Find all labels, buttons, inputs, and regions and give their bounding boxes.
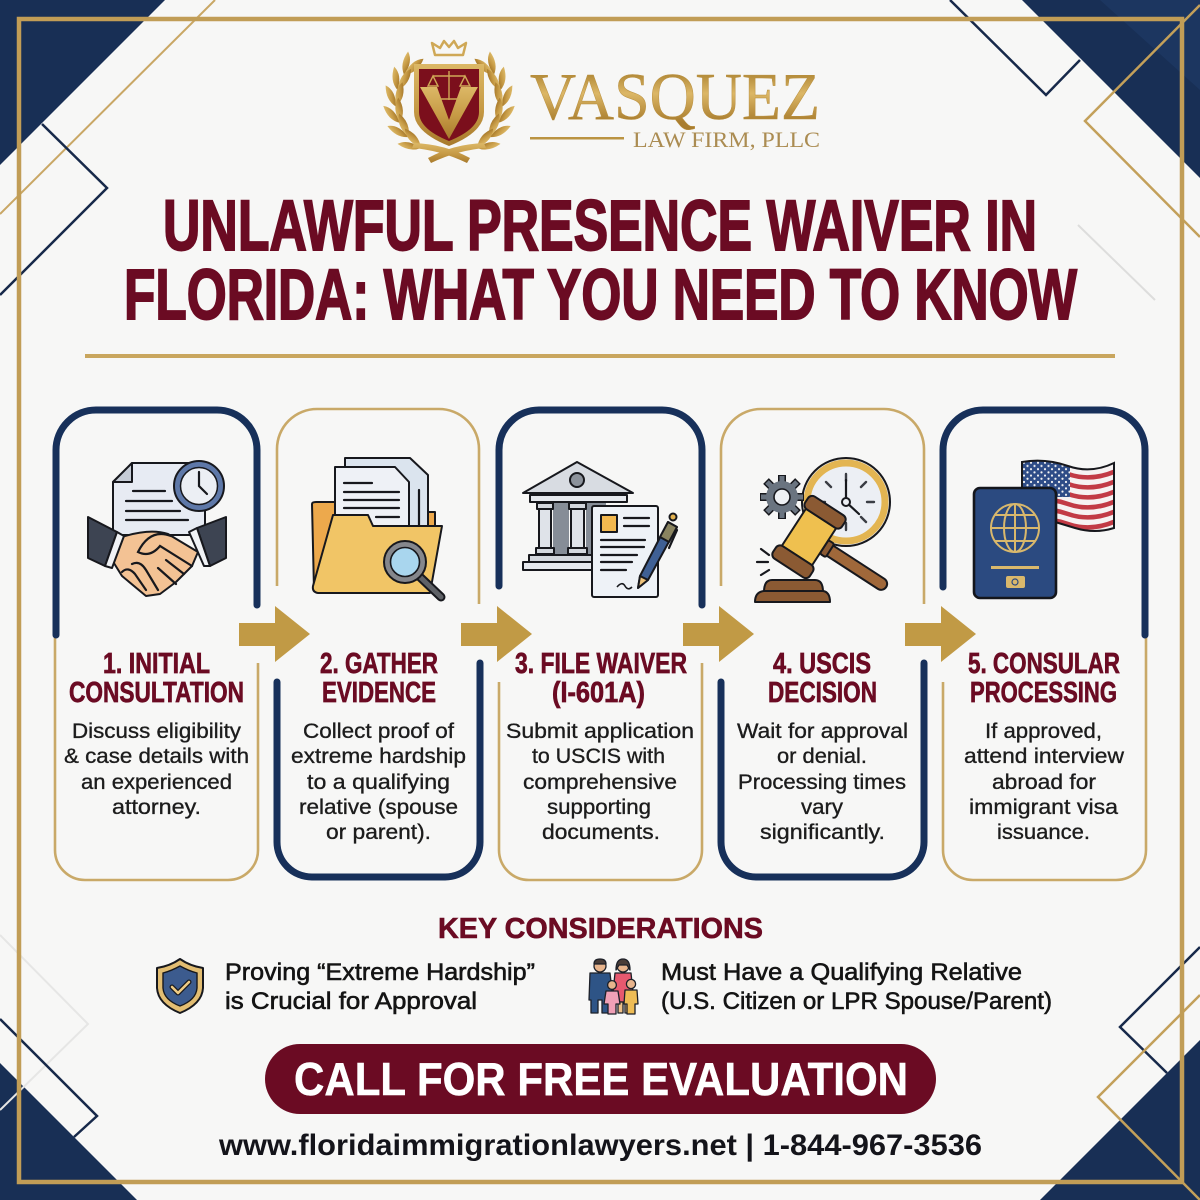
step 4 text <box>737 719 908 844</box>
step 2 text <box>291 719 466 844</box>
icon: family <box>589 959 638 1014</box>
text: extreme hardship <box>225 959 535 1015</box>
step 1 text: an experienced <box>81 770 232 794</box>
consideration: extreme hardship <box>157 959 535 1015</box>
arrow: step 2 to 3 <box>461 606 532 662</box>
text: extreme hardship: Proving “Extreme Hardship” <box>225 959 535 986</box>
step 1 heading: 1. INITIAL <box>103 648 210 680</box>
wordmark: Vasquez: VASQUEZ <box>530 60 820 134</box>
divider line <box>530 137 624 140</box>
title <box>124 187 1077 335</box>
step 4 text: significantly. <box>760 820 885 844</box>
text: qualifying relative: Must Have a Qualifying Relative <box>661 959 1022 986</box>
panel: step 2 <box>277 409 480 877</box>
step 2 text: extreme hardship <box>291 744 466 768</box>
step 5 text: immigrant visa <box>969 795 1118 819</box>
icon: shield with check <box>157 959 203 1013</box>
step 3 heading: 3. FILE WAIVER <box>515 648 687 680</box>
step 5 text <box>964 719 1124 844</box>
consideration: qualifying relative <box>589 959 1052 1015</box>
step 4 heading: 4. USCIS <box>773 648 871 680</box>
panel: step 4 <box>721 409 924 877</box>
icon: handshake and document <box>88 461 226 596</box>
step 5 text: attend interview <box>964 744 1124 768</box>
arrow: step 3 to 4 <box>683 606 754 662</box>
title rule <box>85 354 1115 358</box>
step 2 text: Collect proof of <box>303 719 454 743</box>
icon: folder with magnifier <box>312 458 442 597</box>
step 4 text: vary <box>801 795 843 819</box>
step 2 heading: EVIDENCE <box>322 677 436 709</box>
step 4 text: Wait for approval <box>737 719 908 743</box>
step 3 heading <box>515 648 687 709</box>
step 4 text: or denial. <box>777 744 867 768</box>
panel: step 3 <box>499 410 702 880</box>
step 3 text: supporting <box>547 795 651 819</box>
panel: step 1 <box>55 410 258 880</box>
icon: gavel, gear and clock <box>755 458 906 618</box>
icon: laurel wreath <box>382 50 516 163</box>
step 2 heading <box>320 648 438 709</box>
arrow: step 4 to 5 <box>905 606 976 662</box>
step 1 heading <box>69 648 244 709</box>
step 1 heading: CONSULTATION <box>69 677 244 709</box>
icon: courthouse and signed form <box>523 462 677 597</box>
step 5 text: If approved, <box>985 719 1102 743</box>
step 5 heading: 5. CONSULAR <box>968 648 1120 680</box>
icon: passport and US flag <box>974 455 1116 598</box>
logo <box>382 41 820 163</box>
icon: crown <box>432 41 466 55</box>
step 5 text: abroad for <box>992 770 1096 794</box>
call to action button <box>265 1044 936 1114</box>
step 1 text <box>64 719 249 819</box>
call to action button: CALL FOR FREE EVALUATION <box>294 1053 908 1105</box>
text: qualifying relative <box>661 959 1052 1015</box>
step 4 heading <box>768 648 877 709</box>
step 2 text: relative (spouse <box>299 795 458 819</box>
step 3 text: to USCIS with <box>532 744 665 768</box>
step 1 text: Discuss eligibility <box>72 719 241 743</box>
step 2 text: or parent). <box>326 820 431 844</box>
text: qualifying relative: (U.S. Citizen or LPR Spouse/Parent) <box>661 988 1052 1015</box>
step 1 text: attorney. <box>112 795 201 819</box>
step 5 heading: PROCESSING <box>970 677 1117 709</box>
step 1 text: & case details with <box>64 744 249 768</box>
icon: shield <box>414 64 484 146</box>
wordmark: law firm: LAW FIRM, PLLC <box>633 127 820 152</box>
step 3 text: Submit application <box>506 719 694 743</box>
step 3 text: comprehensive <box>523 770 677 794</box>
step 4 text: Processing times <box>738 770 906 794</box>
step 4 heading: DECISION <box>768 677 877 709</box>
heading: key considerations: KEY CONSIDERATIONS <box>438 913 763 945</box>
step 2 text: to a qualifying <box>307 770 450 794</box>
step 5 heading <box>968 648 1120 709</box>
step 3 text <box>506 719 694 844</box>
panel: step 5 <box>943 410 1146 880</box>
step 3 text: documents. <box>542 820 660 844</box>
step 2 heading: 2. GATHER <box>320 648 438 680</box>
arrow: step 1 to 2 <box>239 606 310 662</box>
contact line: www.floridaimmigrationlawyers.net | 1-844-967-3536 <box>218 1129 982 1162</box>
text: extreme hardship: is Crucial for Approval <box>225 988 477 1015</box>
step 5 text: issuance. <box>997 820 1090 844</box>
step 3 heading: (I-601A) <box>552 677 645 709</box>
